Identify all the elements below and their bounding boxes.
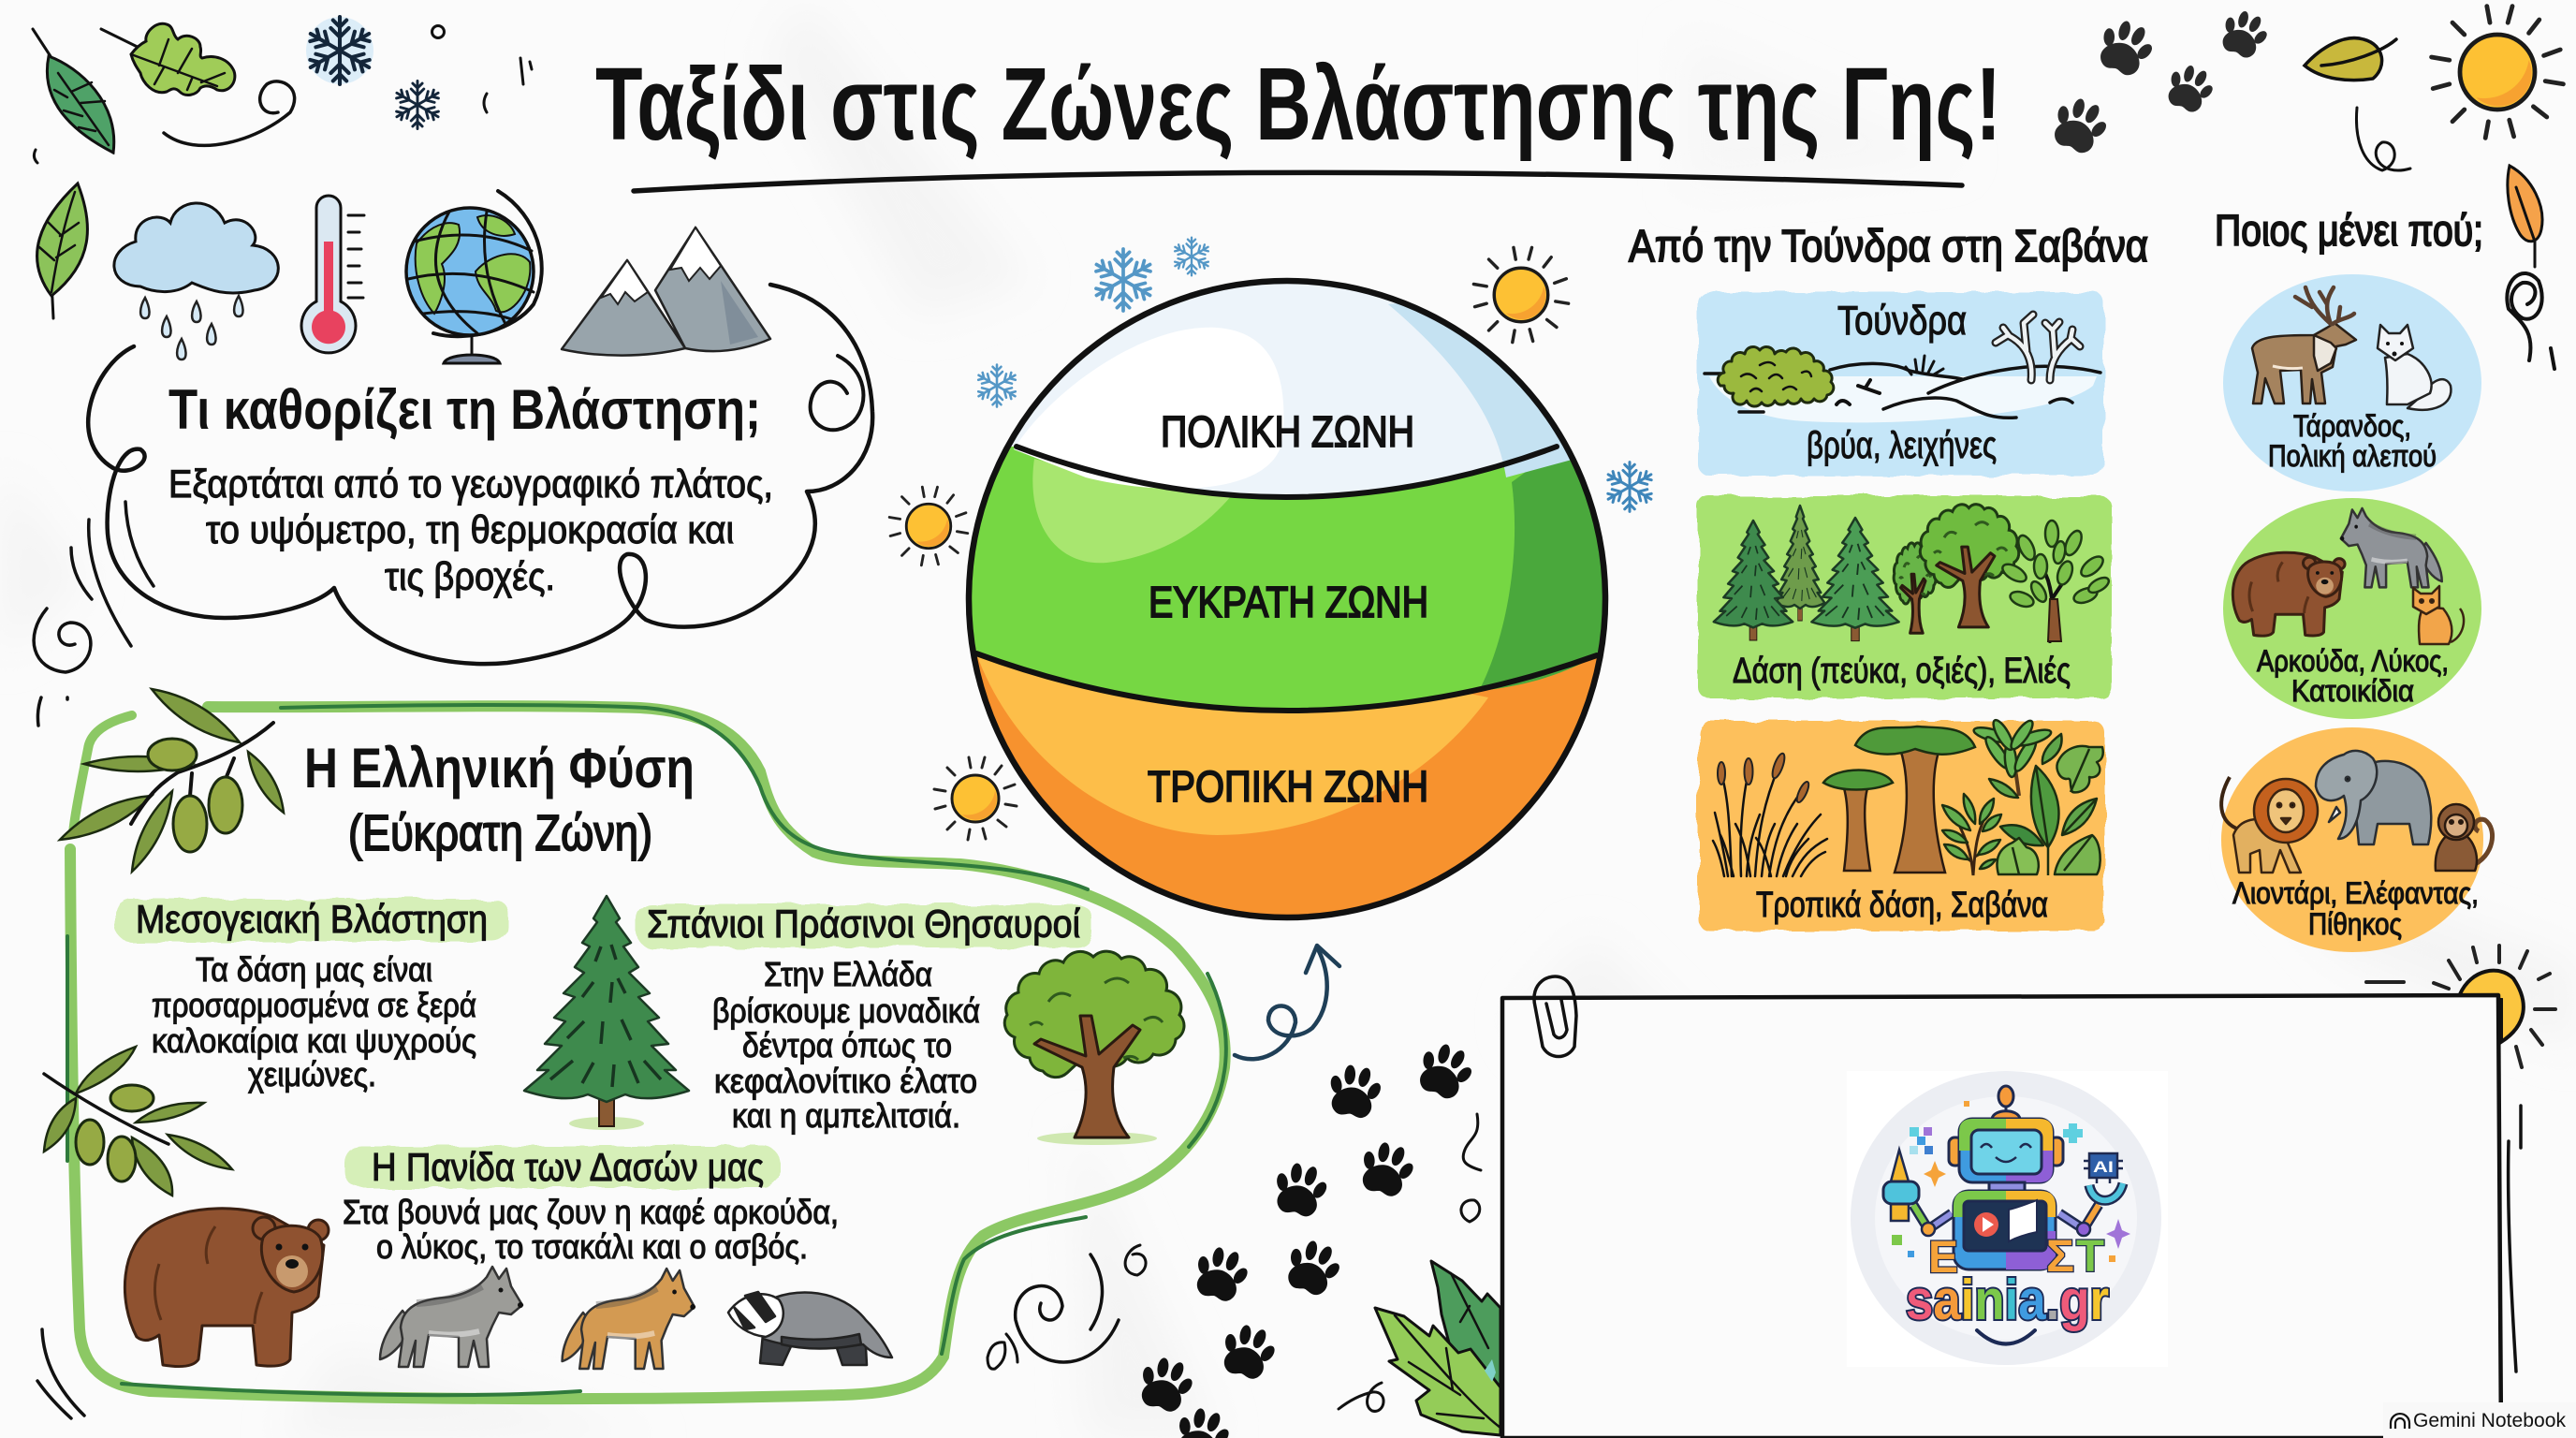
robot (1883, 1086, 2123, 1269)
robot letters: Τ (2076, 1232, 2104, 1282)
logo wordmark: sainia.gr (1906, 1269, 2109, 1331)
body text (168, 462, 773, 598)
animal names: Λιοντάρι, Ελέφαντας, (2232, 876, 2479, 910)
body text: Στα βουνά μας ζουν η καφέ αρκούδα, (343, 1193, 839, 1231)
robot letters (1928, 1232, 2104, 1283)
title underline (634, 172, 1962, 191)
decorative spiral right (2507, 273, 2554, 369)
circle: tropical animals (2221, 727, 2493, 952)
sphere outline (969, 281, 1605, 917)
logo smile (1977, 1330, 2035, 1344)
highlight pill (116, 899, 508, 942)
decorative curl top right (2356, 108, 2410, 170)
animal names (2268, 409, 2437, 473)
icon: cat (2413, 586, 2464, 644)
body text: Εξαρτάται από το γεωγραφικό πλάτος, (168, 462, 773, 506)
body text: το υψόμετρο, τη θερμοκρασία και (206, 507, 734, 551)
icon: badger (728, 1292, 892, 1365)
note card with paperclip (1502, 976, 2501, 1438)
card: temperate forest (1698, 496, 2112, 698)
robot chip label: AI (2093, 1158, 2114, 1176)
section: forest fauna (343, 1145, 839, 1266)
icon: leaves behind note (1339, 1261, 1500, 1435)
card caption: Δάση (πεύκα, οξιές), Ελιές (1733, 652, 2071, 691)
card caption: Τροπικά δάση, Σαβάνα (1756, 886, 2048, 925)
animal names: Αρκούδα, Λύκος, (2257, 644, 2449, 678)
animal names (2257, 644, 2449, 708)
icon: orange leaf right (2508, 166, 2542, 267)
card caption: βρύα, λειχήνες (1807, 425, 1997, 466)
robot letters: Ε (1928, 1233, 1958, 1283)
icon: green leaf top-left (33, 29, 114, 153)
animal names: Πίθηκος (2308, 907, 2402, 941)
decorative wind lines and spiral left (34, 502, 154, 726)
illustration: tundra landscape (1705, 315, 2100, 422)
icon: yellow-green leaf top right (2305, 38, 2396, 81)
card title: Τούνδρα (1837, 298, 1967, 344)
note card (1502, 995, 2501, 1438)
body text: προσαρμοσμένα σε ξερά (152, 986, 476, 1024)
icon: sun lower left of sphere (934, 757, 1017, 840)
panel: vegetation zones sphere (966, 277, 1608, 921)
body text: χειμώνες. (248, 1055, 376, 1093)
icon: rain cloud (114, 203, 278, 360)
animal names: Κατοικίδια (2291, 674, 2414, 708)
icon: elephant (2316, 751, 2431, 844)
section: Mediterranean vegetation (116, 897, 508, 1093)
icon: olive branch left (44, 1047, 232, 1196)
animal names: Τάρανδος, (2293, 409, 2411, 443)
watermark: Gemini Notebook (2383, 1402, 2576, 1438)
heading: what determines vegetation: Τι καθορίζει τη Βλάστηση; (168, 378, 761, 441)
decorative marks top (34, 26, 532, 163)
icon: bear (2232, 552, 2345, 636)
icon: large snowflake (306, 17, 373, 84)
heading: Greek nature: Η Ελληνική Φύση (304, 737, 695, 800)
card: tropical (1698, 717, 2104, 931)
section: from tundra to savanna (1629, 222, 2148, 931)
body text (152, 950, 476, 1093)
logo: sainia.gr (1847, 1071, 2168, 1367)
icon: reindeer (2252, 287, 2356, 404)
icon: olive branch top (60, 689, 284, 872)
body text: τις βροχές. (385, 554, 555, 598)
icon: thermometer (301, 196, 364, 353)
icon: jackal (563, 1269, 695, 1369)
icon: big sun top right (2432, 7, 2563, 138)
body text (712, 955, 980, 1135)
icon: green leaf left (37, 183, 87, 318)
highlight pill (637, 904, 1092, 947)
sparkles (1892, 1101, 2130, 1262)
icon: paperclip (1534, 976, 1576, 1056)
decorative swirls beside panel (37, 1245, 1146, 1418)
icon: sun left of sphere (889, 487, 968, 565)
body text: κεφαλονίτικο έλατο (714, 1062, 977, 1100)
decorative curl top-left (164, 81, 295, 145)
icon: wolf (2340, 508, 2442, 587)
body text (343, 1193, 839, 1266)
title: Ταξίδι στις Ζώνες Βλάστησης της Γης! (595, 47, 2001, 162)
decorative lines right of note (2509, 1106, 2521, 1372)
section: who lives where (2215, 206, 2493, 952)
circle: polar animals (2223, 274, 2481, 492)
circle: temperate animals (2223, 498, 2481, 719)
decorative bracket marks left of note (1461, 1114, 1481, 1222)
arrow: curly arrow pointing to sphere (1235, 946, 1339, 1059)
illustration: olive tree (1999, 521, 2111, 641)
cloud swirl (811, 356, 863, 430)
icon: broadleaf tree (1004, 951, 1184, 1145)
icon: blue snowflakes (976, 238, 1654, 511)
animal names (2232, 876, 2479, 941)
icon: globe on stand (406, 191, 542, 363)
icon: sun behind note corner (2366, 946, 2555, 1067)
illustration: forest trees (1714, 505, 2111, 641)
sub-heading: Η Πανίδα των Δασών μας (372, 1145, 764, 1189)
reeds (1713, 752, 1827, 876)
body text: βρίσκουμε μοναδικά (712, 991, 980, 1030)
robot letters: Σ (2046, 1232, 2074, 1282)
body text: ο λύκος, το τσακάλι και ο ασβός. (376, 1227, 808, 1266)
highlight pill (344, 1146, 780, 1188)
illustration: reeds, baobabs and jungle (1713, 717, 2103, 876)
icon: small snowflake (394, 81, 441, 129)
body text: δέντρα όπως το (742, 1026, 952, 1064)
body text: και η αμπελιτσιά. (732, 1096, 960, 1135)
jungle plants (1942, 717, 2103, 875)
card: tundra (1698, 292, 2104, 476)
icon: paw prints centre bottom (1133, 1036, 1480, 1438)
heading: Greek nature (304, 737, 695, 861)
cloud outline (88, 285, 872, 664)
icon: brown bear (124, 1209, 329, 1367)
sphere fills (972, 285, 1603, 915)
animal names: Πολική αλεπού (2268, 439, 2437, 473)
polar zone label: ΠΟΛΙΚΗ ΖΩΝΗ (1161, 407, 1414, 456)
icon: oak leaf (101, 23, 235, 95)
icon: wolf (380, 1267, 523, 1367)
polar boundary (1017, 447, 1557, 497)
body text: καλοκαίρια και ψυχρούς (152, 1021, 476, 1060)
sub-heading: Σπάνιοι Πράσινοι Θησαυροί (647, 902, 1080, 946)
icon: fir tree (524, 896, 689, 1130)
temperate zone label: ΕΥΚΡΑΤΗ ΖΩΝΗ (1149, 578, 1428, 626)
heading: Ποιος μένει πού; (2215, 206, 2483, 255)
sub-heading: Μεσογειακή Βλάστηση (136, 897, 488, 941)
panel: Greek nature (44, 689, 1226, 1399)
panel: what determines vegetation (88, 191, 872, 664)
panel border (67, 705, 1226, 1399)
heading: Από την Τούνδρα στη Σαβάνα (1629, 222, 2148, 271)
icon: arctic fox (2378, 325, 2451, 410)
body text: Τα δάση μας είναι (196, 950, 432, 989)
watermark: Gemini Notebook: Gemini Notebook (2413, 1410, 2566, 1431)
icon: monkey (2436, 804, 2493, 871)
body text: Στην Ελλάδα (764, 955, 932, 993)
section: rare green treasures (637, 902, 1092, 1135)
icon: sun upper right of sphere (1473, 247, 1569, 343)
icon: snowy mountains (562, 227, 770, 356)
tropical zone label: ΤΡΟΠΙΚΗ ΖΩΝΗ (1148, 762, 1428, 811)
tropic boundary (976, 653, 1597, 711)
heading: Greek nature: (Εύκρατη Ζώνη) (348, 805, 652, 861)
icon: lion (2221, 777, 2318, 873)
icon: paw prints top right (2045, 5, 2275, 159)
